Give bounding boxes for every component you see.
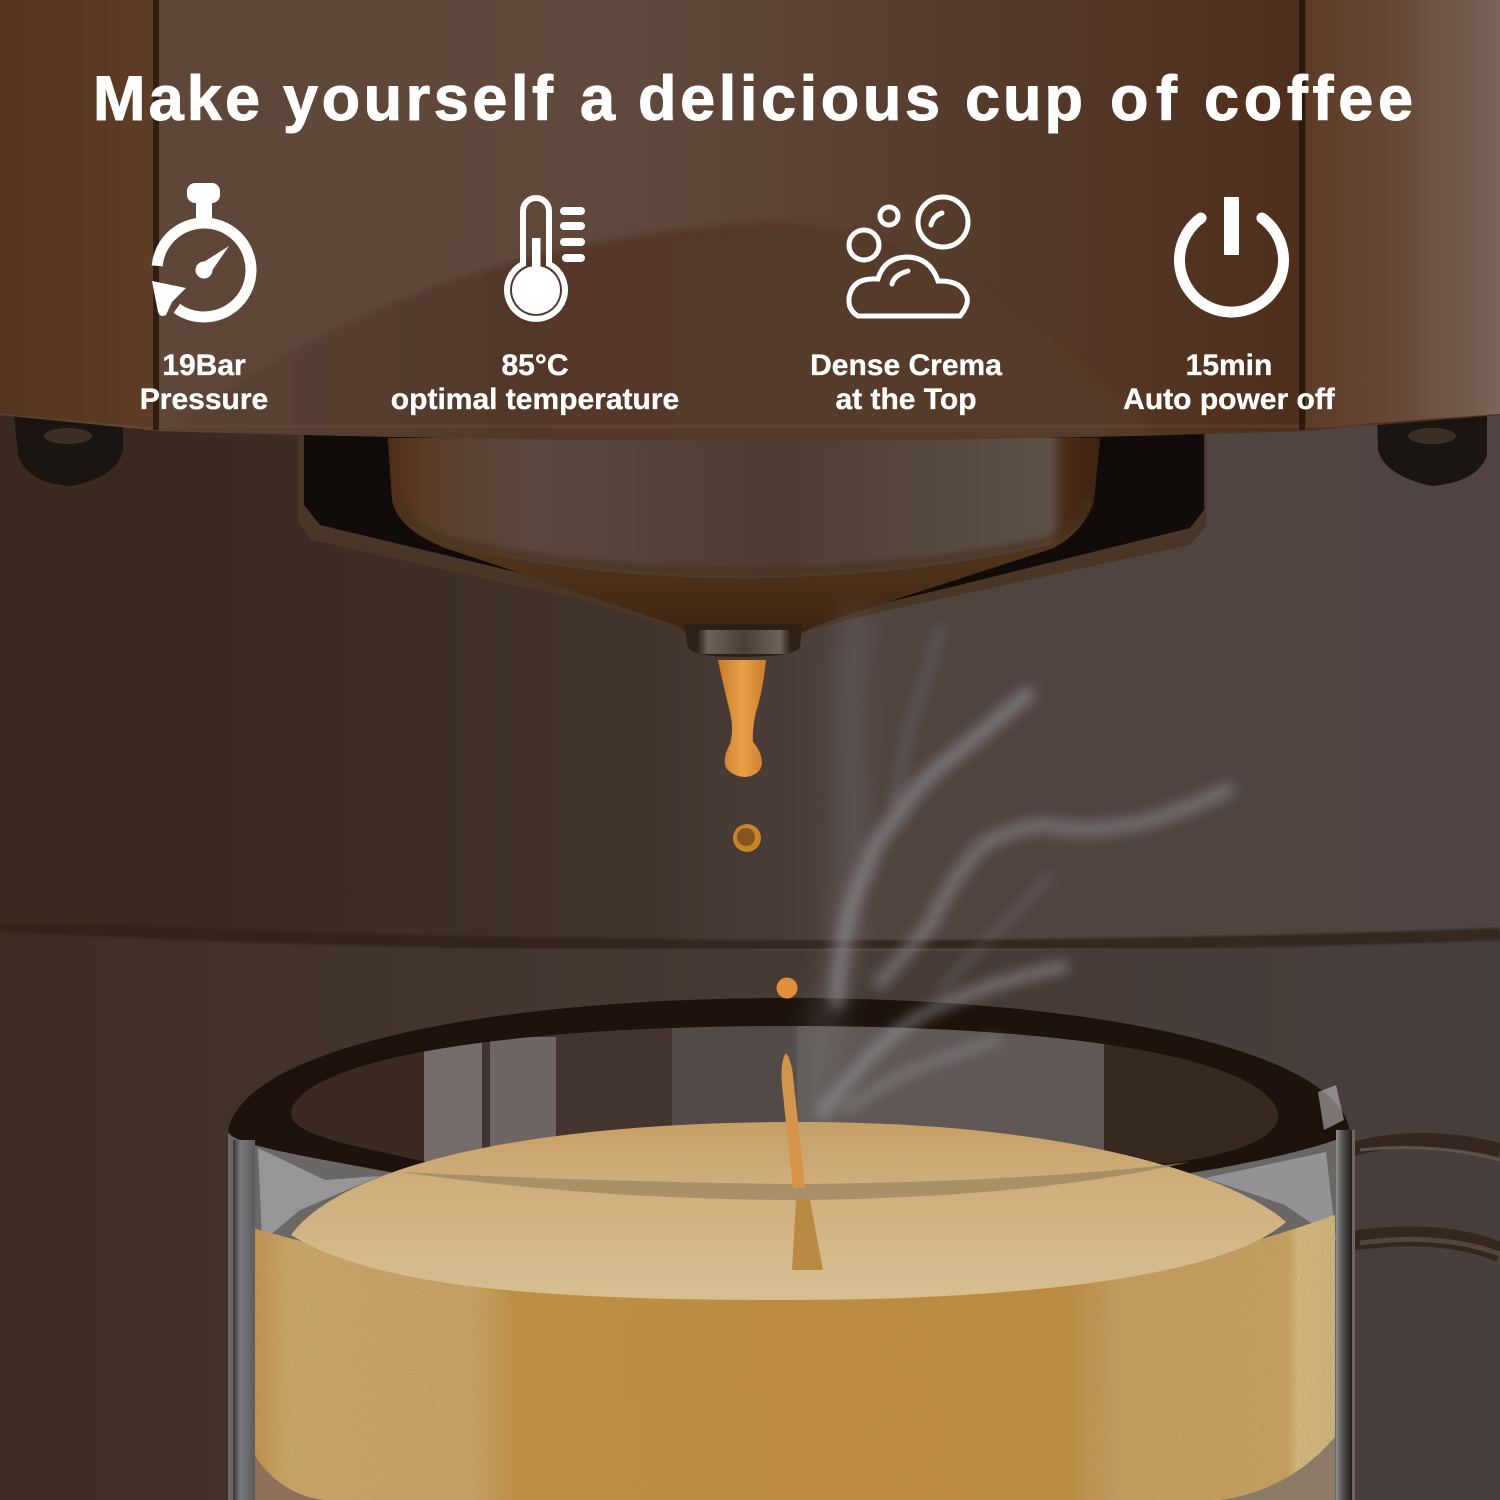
glass mug xyxy=(228,998,1355,1500)
label: dense crema: at the Top xyxy=(835,383,977,416)
front rim seen through crema xyxy=(400,1162,1190,1200)
brew head cup xyxy=(388,438,1100,634)
mug handle xyxy=(1350,1140,1500,1254)
icon: power xyxy=(1180,197,1284,312)
title: coffee xyxy=(1204,64,1413,134)
rim xyxy=(228,998,1350,1176)
label: auto power off: Auto power off xyxy=(1123,383,1336,416)
title: of xyxy=(1110,64,1178,134)
icon: stopwatch xyxy=(152,183,255,321)
glass walls xyxy=(233,1140,255,1500)
feature: 19Bar pressure xyxy=(140,183,268,416)
label: 85C temperature: optimal temperature xyxy=(391,383,679,416)
mug interior xyxy=(291,1026,1278,1163)
label: dense crema: Dense Crema xyxy=(810,349,1002,382)
feature: auto power off xyxy=(1123,197,1336,416)
title: cup xyxy=(965,64,1083,134)
feature: dense crema xyxy=(810,197,1002,416)
label: 19Bar pressure: Pressure xyxy=(140,383,268,416)
title xyxy=(93,64,1413,134)
crema top xyxy=(291,1122,1286,1300)
label: auto power off: 15min xyxy=(1186,349,1272,382)
icon: thermometer xyxy=(507,198,581,319)
steam xyxy=(814,618,1227,1115)
label: 85C temperature: 85°C xyxy=(501,349,569,382)
machine feet xyxy=(14,415,1487,486)
label: 19Bar pressure: 19Bar xyxy=(162,349,246,382)
shoulder reflections xyxy=(258,1148,380,1242)
title: yourself xyxy=(283,64,554,134)
coffee body xyxy=(253,1210,1336,1500)
machine body xyxy=(0,0,1500,445)
title: delicious xyxy=(638,64,940,134)
coffee drip from nozzle xyxy=(718,660,766,777)
coffee stream in mug xyxy=(782,1053,823,1270)
feature: 85C temperature xyxy=(391,198,679,416)
title: a xyxy=(580,64,616,134)
coffee drops xyxy=(733,824,798,998)
machine black bracket xyxy=(298,432,1206,632)
icon: bubbles and foam xyxy=(849,197,968,316)
glass shoulder xyxy=(228,1130,1355,1500)
title: Make xyxy=(93,64,260,134)
nozzle xyxy=(684,624,802,657)
